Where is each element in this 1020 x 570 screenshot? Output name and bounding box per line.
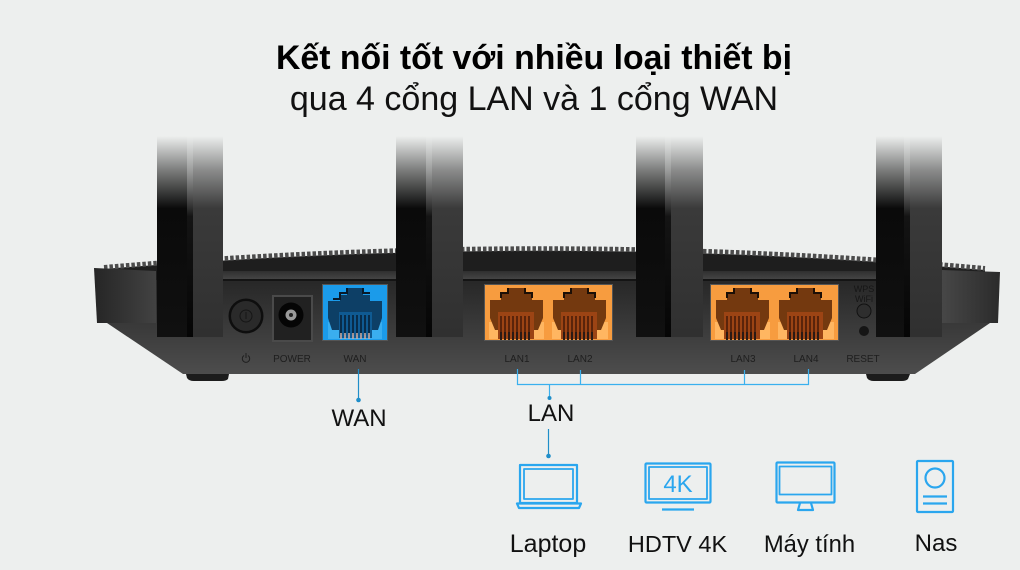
- WAN port: [322, 284, 388, 341]
- icon: desktop monitor: [776, 462, 834, 510]
- antenna 2: [396, 136, 463, 337]
- icon: NAS: [917, 461, 953, 512]
- Nas caption: Nas: [915, 530, 957, 557]
- LAN 2 port: [548, 285, 612, 340]
- port labels: [242, 353, 880, 365]
- port labels: LAN1: [504, 354, 530, 365]
- Máy tính caption: Máy tính: [764, 531, 855, 558]
- LAN 1 port: [484, 284, 613, 341]
- router top dark shell: [104, 251, 985, 295]
- router feet: [186, 374, 910, 381]
- port labels: WAN: [344, 354, 366, 365]
- title: [276, 39, 792, 118]
- right wing: [942, 270, 1000, 323]
- power socket: [272, 295, 313, 342]
- LAN 3 port: [710, 284, 839, 341]
- LAN label: LAN: [528, 400, 574, 427]
- port labels: POWER: [273, 354, 311, 365]
- antenna 1: [157, 136, 223, 337]
- port labels: LAN2: [567, 354, 593, 365]
- LAN bracket connector: [518, 369, 808, 400]
- title: qua 4 cổng LAN và 1 cổng WAN: [290, 80, 778, 118]
- port labels: RESET: [846, 354, 880, 365]
- antenna 4: [876, 136, 942, 337]
- port labels: LAN3: [730, 354, 756, 365]
- antenna 3: [636, 136, 703, 337]
- title: Kết nối tốt với nhiều loại thiết bị: [276, 39, 792, 77]
- WAN label: WAN: [331, 405, 387, 432]
- WPS and reset buttons: [854, 284, 874, 336]
- WAN connector: [356, 369, 361, 402]
- power button: [228, 298, 264, 334]
- WPS and reset buttons: WiFi: [855, 294, 873, 304]
- router body: [107, 280, 990, 374]
- port labels: LAN4: [793, 354, 819, 365]
- left wing: [94, 268, 156, 323]
- icon: 4K TV: 4K: [663, 471, 693, 498]
- router top ridge: [104, 249, 985, 268]
- LAN 4 port: [774, 285, 838, 340]
- icon: laptop: [517, 465, 581, 508]
- icon: 4K TV: [646, 464, 710, 510]
- LAN to laptop connector: [546, 429, 551, 458]
- router: [94, 136, 1000, 381]
- HDTV 4K caption: HDTV 4K: [628, 531, 727, 557]
- WPS and reset buttons: WPS: [854, 284, 874, 294]
- Laptop caption: Laptop: [510, 530, 586, 558]
